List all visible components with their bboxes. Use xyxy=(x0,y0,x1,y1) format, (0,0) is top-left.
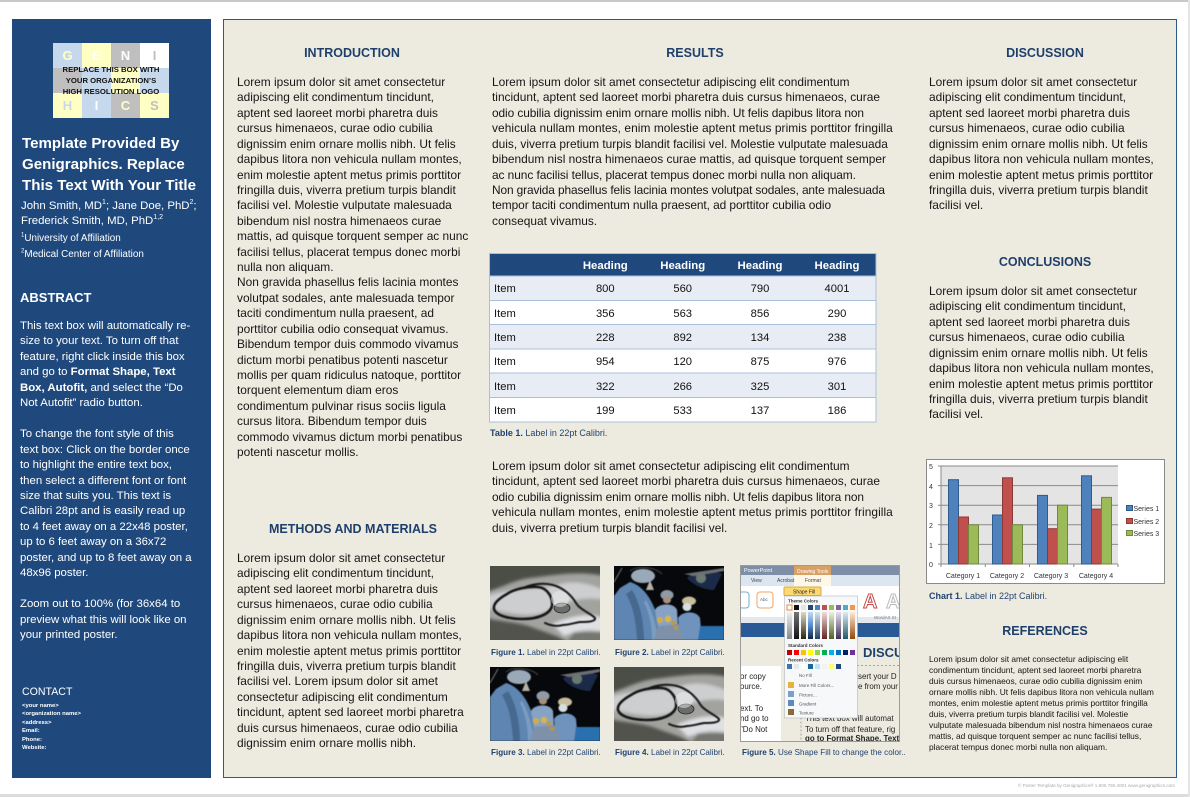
bar chart: 5 xyxy=(929,464,933,471)
bar chart: Category 1 xyxy=(946,573,980,580)
text: conclusions: fringilla duis, viverra pretium turpis blandit xyxy=(929,392,1148,406)
text: results continued: Lorem ipsum dolor sit amet consectetur adipiscing elit condimentum xyxy=(492,459,850,473)
text: introduction: nulla non aliquam. xyxy=(237,260,334,274)
abstract text: This text box will automatically re- xyxy=(20,320,190,332)
abstract text: Not Autofit” radio button. xyxy=(20,397,143,409)
text: conclusions xyxy=(929,284,1154,421)
text: introduction: aptent sed laoreet morbi pharetra duis xyxy=(237,106,438,120)
heading: introduction: INTRODUCTION xyxy=(304,46,400,60)
text: results continued xyxy=(492,459,893,535)
abstract text: Zoom out to 100% (for 36x64 to xyxy=(20,598,180,610)
figure 5: shape fill screenshot: Acrobat xyxy=(777,578,795,584)
text: methods and materials: cursus himenaeos, curae odio cubilia xyxy=(237,597,433,611)
table 1: 892 xyxy=(673,332,692,344)
text: results xyxy=(492,75,893,228)
text: discussion: dapibus litora non vehicula nullam montes, xyxy=(929,152,1154,166)
abstract text: Box, Autofit, and select the “Do xyxy=(20,382,183,394)
figure 5: shape fill screenshot: More Fill Colors... xyxy=(799,683,834,688)
bar chart: Category 2 xyxy=(990,573,1024,580)
table 1: 533 xyxy=(673,405,692,417)
bar chart: 2 xyxy=(929,523,933,530)
text: introduction: Lorem ipsum dolor sit amet consectetur xyxy=(237,75,445,89)
table 1: 228 xyxy=(596,332,615,344)
text: methods and materials: facilisi vel. Lorem ipsum dolor sit amet xyxy=(237,674,438,688)
text: results: ac nunc facilisi tellus, placerat tempus donec morbi nulla non aliquam. xyxy=(492,168,856,182)
text: references: mattis, ad quisque torquent semper ac nunc facilisi tellus, xyxy=(929,731,1141,741)
table 1: 137 xyxy=(751,405,769,417)
table 1: Heading xyxy=(815,260,860,272)
text: results continued: duis, viverra pretium turpis blandit facilisi vel. xyxy=(492,521,727,535)
poster title: Template Provided By xyxy=(22,135,179,152)
text: methods and materials: dignissim enim ornare mollis nibh. Ut felis xyxy=(237,613,456,627)
bar chart: 3 xyxy=(929,503,933,510)
text: discussion: adipiscing elit condimentum tincidunt, xyxy=(929,90,1126,104)
table 1: Item xyxy=(494,356,516,368)
table 1: 266 xyxy=(673,381,692,393)
logo placeholder xyxy=(53,43,169,118)
contact details: <address> xyxy=(22,720,51,726)
figure 4: stethoscope photo xyxy=(614,667,724,741)
contact heading: CONTACT xyxy=(22,686,72,698)
poster title xyxy=(22,135,196,194)
text: introduction: facilisi tellus, placerat tempus donec morbi xyxy=(237,245,460,259)
table 1: 563 xyxy=(673,308,692,320)
abstract heading: ABSTRACT xyxy=(20,290,92,305)
caption: figure 5: Figure 5. Use Shape Fill to change the color.. xyxy=(742,748,906,757)
table 1: Item xyxy=(494,283,516,295)
figure 5: shape fill screenshot: e from your xyxy=(858,682,898,691)
text: methods and materials: tincidunt, aptent sed laoreet morbi pharetra xyxy=(237,705,464,719)
text: conclusions: dignissim enim ornare mollis nibh. Ut felis xyxy=(929,346,1148,360)
table 1: 199 xyxy=(596,405,615,417)
affiliations: 2Medical Center of Affiliation xyxy=(21,249,144,260)
heading: conclusions: CONCLUSIONS xyxy=(999,255,1091,269)
logo placeholder: H xyxy=(63,98,72,113)
bar chart: 0 xyxy=(929,562,933,569)
table 1: 954 xyxy=(596,356,615,368)
bar chart xyxy=(926,459,1165,584)
logo placeholder: S xyxy=(150,98,159,113)
text: conclusions: facilisi vel. xyxy=(929,407,983,421)
table 1: Item xyxy=(494,308,516,320)
text: discussion: facilisi vel. xyxy=(929,198,983,212)
abstract text: your printed poster. xyxy=(20,629,118,641)
figure 5: shape fill screenshot: or copy xyxy=(740,672,766,681)
bar chart: Category 4 xyxy=(1079,573,1113,580)
abstract text: Calibri 28pt and is easily read up xyxy=(20,505,185,517)
text: results: vehicula nullam montes, enim molestie aptent metus primis porttitor fringilla xyxy=(492,121,893,135)
text: results: duis, viverra pretium turpis blandit facilisi vel. Molestie vulputate malesuada xyxy=(492,137,888,151)
text: conclusions: cursus himenaeos, curae odio cubilia xyxy=(929,330,1125,344)
text: results: bibendum nisl nostra himenaeos curae mattis, ad quisque torquent semper xyxy=(492,152,886,166)
figure 5: shape fill screenshot: Picture... xyxy=(799,692,817,698)
text: references: montes, enim molestie aptent metus primis porttitor fringilla xyxy=(929,698,1148,708)
text: results: Non gravida phasellus felis lacinia montes volutpat sodales, ante malesuada xyxy=(492,183,885,197)
authors: John Smith, MD1; Jane Doe, PhD2; xyxy=(21,199,197,212)
logo placeholder: G xyxy=(62,48,73,63)
abstract text: up to 6 feet away on a 36x72 xyxy=(20,536,166,548)
affiliations: 1University of Affiliation xyxy=(21,233,121,244)
text: methods and materials: fringilla duis, viverra pretium turpis blandit xyxy=(237,659,456,673)
table 1: Item xyxy=(494,332,516,344)
text: discussion: aptent sed laoreet morbi pharetra duis xyxy=(929,106,1130,120)
text: conclusions: Lorem ipsum dolor sit amet consectetur xyxy=(929,284,1137,298)
figure 5: shape fill screenshot: nd go to xyxy=(740,714,769,723)
text: methods and materials xyxy=(237,551,464,750)
table 1: 976 xyxy=(828,356,846,368)
table 1: Heading xyxy=(583,260,628,272)
text: introduction: taciti condimentum nulla praesent, ad xyxy=(237,306,434,320)
panel: left sidebar xyxy=(12,19,211,778)
text: introduction: fringilla duis, viverra pretium turpis blandit xyxy=(237,183,456,197)
text: introduction: mattis, ad quisque torquent semper ac nunc xyxy=(237,229,468,243)
text: results: tempor taciti condimentum nulla praesent, ad porttitor cubilia odio xyxy=(492,198,831,212)
abstract text: To change the font style of this xyxy=(20,428,174,440)
figure 1: stethoscope photo xyxy=(490,566,600,640)
text: references: vulputate malesuada bibendum nisl nostra himenaeos curae xyxy=(929,720,1152,730)
text: introduction: commodo vivamus dictum morbi penatibus xyxy=(237,430,462,444)
contact details: Website: xyxy=(22,745,46,751)
affiliations xyxy=(21,232,144,260)
table 1: Item xyxy=(494,381,516,393)
figure 5: shape fill screenshot: ource. xyxy=(740,682,762,691)
text: results: odio cubilia dignissim enim ornare mollis nibh. Ut felis dapibus litora non xyxy=(492,106,864,120)
contact details xyxy=(22,703,81,751)
bar chart: Series 2 xyxy=(1134,519,1159,526)
text: results: consequat vivamus. xyxy=(492,214,597,228)
logo placeholder: HIGH RESOLUTION LOGO xyxy=(63,87,159,96)
heading: methods and materials: METHODS AND MATERIALS xyxy=(269,522,437,536)
logo placeholder: I xyxy=(95,98,98,113)
text: methods and materials: duis cursus himenaeos, curae odio cubilia xyxy=(237,721,458,735)
footer credit: © Poster Template by Genigraphics® 1.800.790.4001 www.genigraphics.com xyxy=(1018,783,1175,788)
text: introduction: mollis per quam ridiculus natoque, porttitor xyxy=(237,368,461,382)
figure 5: shape fill screenshot: A xyxy=(863,591,877,613)
contact details: <organization name> xyxy=(22,711,81,717)
table 1: 186 xyxy=(828,405,846,417)
logo placeholder: N xyxy=(121,48,130,63)
text: discussion: fringilla duis, viverra pretium turpis blandit xyxy=(929,183,1148,197)
text: discussion: cursus himenaeos, curae odio cubilia xyxy=(929,121,1125,135)
abstract text: size that suits you. This text is xyxy=(20,490,171,502)
figure 5: shape fill screenshot: Recent Colors xyxy=(788,658,819,662)
text: introduction: cursus himenaeos, curae odio cubilia xyxy=(237,121,433,135)
text: introduction: porttitor cubilia odio consequat vivamus. xyxy=(237,322,449,336)
text: introduction: cursus litora. Bibendum tempor duis xyxy=(237,414,427,428)
abstract text: then select a different font or font xyxy=(20,475,186,487)
abstract text: and go to Format Shape, Text xyxy=(20,366,176,378)
figure 5: shape fill screenshot xyxy=(740,565,900,742)
contact details: <your name> xyxy=(22,703,59,709)
table 1: 790 xyxy=(751,283,769,295)
logo placeholder: REPLACE THIS BOX WITH xyxy=(63,65,159,74)
authors: Frederick Smith, MD, PhD1,2 xyxy=(21,214,163,227)
text: methods and materials: consectetur adipiscing elit condimentum xyxy=(237,690,448,704)
text: methods and materials: aptent sed laoreet morbi pharetra duis xyxy=(237,582,438,596)
logo placeholder: E xyxy=(92,48,101,63)
text: methods and materials: enim molestie aptent metus primis porttitor xyxy=(237,644,461,658)
caption: figure 3: Figure 3. Label in 22pt Calibri. xyxy=(491,748,601,757)
text: references: duis cursus himenaeos, curae odio cubilia dignissim enim xyxy=(929,676,1142,686)
figure 2: surgeons photo xyxy=(614,566,724,640)
figure 5: shape fill screenshot: Shape Fill xyxy=(793,590,815,596)
caption: figure 1: Figure 1. Label in 22pt Calibri. xyxy=(491,648,601,657)
table 1: 238 xyxy=(828,332,846,344)
contact details: Phone: xyxy=(22,737,42,743)
text: introduction: dictum morbi penatibus potenti nascetur xyxy=(237,353,448,367)
text: introduction: dapibus litora non vehicula nullam montes, xyxy=(237,152,462,166)
text: conclusions: enim molestie aptent metus primis porttitor xyxy=(929,377,1153,391)
abstract text: poster, and up to 8 feet away on a xyxy=(20,552,192,564)
abstract text xyxy=(20,320,192,641)
caption: figure 2: Figure 2. Label in 22pt Calibri. xyxy=(615,648,725,657)
text: introduction xyxy=(237,75,468,459)
figure 5: shape fill screenshot: WordArt St xyxy=(874,615,897,620)
text: introduction: facilisi vel. Molestie vulputate malesuada xyxy=(237,198,452,212)
abstract text: 48x96 poster. xyxy=(20,567,88,579)
figure 5: shape fill screenshot: Abc xyxy=(760,597,769,602)
heading: results: RESULTS xyxy=(666,46,724,60)
abstract text: to highlight the entire text box, xyxy=(20,459,172,471)
text: introduction: adipiscing elit condimentum tincidunt, xyxy=(237,90,434,104)
table 1: 322 xyxy=(596,381,615,393)
table 1: 560 xyxy=(673,283,692,295)
bar chart: Series 3 xyxy=(1134,531,1159,538)
text: results: tincidunt, aptent sed laoreet morbi pharetra duis cursus himenaeos, curae xyxy=(492,90,880,104)
table 1: 325 xyxy=(751,381,769,393)
figure 5: shape fill screenshot: PowerPoint xyxy=(744,568,773,574)
text: introduction: torquent elementum diam eros xyxy=(237,383,398,397)
text: introduction: volutpat sodales, ante malesuada tempor xyxy=(237,291,454,305)
figure 5: shape fill screenshot: To turn off that feature, rig xyxy=(805,725,895,734)
text: introduction: Non gravida phasellus felis lacinia montes xyxy=(237,275,458,289)
abstract text: size to your text. To turn off that xyxy=(20,335,178,347)
table 1: 800 xyxy=(596,283,615,295)
figure 5: shape fill screenshot: No Fill xyxy=(799,673,812,678)
table 1: 290 xyxy=(828,308,846,320)
text: references: placerat tempus donec morbi nulla non aliquam. xyxy=(929,742,1107,752)
figure 5: shape fill screenshot: Standard Colors xyxy=(788,643,824,648)
logo placeholder: YOUR ORGANIZATION’S xyxy=(66,76,156,85)
text: references: duis, viverra pretium turpis blandit facilisi vel. Molestie xyxy=(929,709,1128,719)
text: methods and materials: dignissim enim ornare mollis nibh. xyxy=(237,736,416,750)
figure 5: shape fill screenshot: Format xyxy=(805,578,821,584)
text: introduction: condimentum pulvinar risus sociis ligula xyxy=(237,399,446,413)
text: results continued: tincidunt, aptent sed laoreet morbi pharetra duis cursus himenaeos, curae xyxy=(492,474,880,488)
heading: references: REFERENCES xyxy=(1002,624,1088,638)
text: methods and materials: adipiscing elit condimentum tincidunt, xyxy=(237,566,434,580)
text: conclusions: aptent sed laoreet morbi pharetra duis xyxy=(929,315,1130,329)
panel: main content xyxy=(223,19,1177,778)
figure 5: shape fill screenshot: Drawing Tools xyxy=(797,569,829,575)
caption: chart 1: Chart 1. Label in 22pt Calibri. xyxy=(929,591,1047,601)
caption: figure 4: Figure 4. Label in 22pt Calibri. xyxy=(615,748,725,757)
bar chart: Category 3 xyxy=(1034,573,1068,580)
table 1: 4001 xyxy=(825,283,849,295)
text: introduction: bibendum nisl nostra himenaeos curae xyxy=(237,214,441,228)
figure 5: shape fill screenshot: View xyxy=(751,578,762,584)
text: results continued: vehicula nullam montes, enim molestie aptent metus primis porttitor fringilla xyxy=(492,505,893,519)
table 1: 120 xyxy=(673,356,692,368)
abstract text: preview what this will look like on xyxy=(20,614,186,626)
table 1: Item xyxy=(494,405,516,417)
table 1: 301 xyxy=(828,381,846,393)
text: references: condimentum tincidunt, aptent sed laoreet morbi pharetra xyxy=(929,665,1141,675)
table 1: Heading xyxy=(738,260,783,272)
text: discussion: dignissim enim ornare mollis nibh. Ut felis xyxy=(929,137,1148,151)
table 1 xyxy=(489,253,876,422)
authors xyxy=(21,199,197,227)
text: results continued: odio cubilia dignissim enim ornare mollis nibh. Ut felis dapibus litora non xyxy=(492,490,864,504)
table 1: Heading xyxy=(660,260,705,272)
poster title: Genigraphics. Replace xyxy=(22,156,185,173)
figure 5: shape fill screenshot: ext. To xyxy=(740,704,764,713)
text: discussion: enim molestie aptent metus primis porttitor xyxy=(929,168,1153,182)
text: conclusions: dapibus litora non vehicula nullam montes, xyxy=(929,361,1154,375)
bar chart: 1 xyxy=(929,543,933,550)
text: introduction: enim molestie aptent metus primis porttitor xyxy=(237,168,461,182)
poster title: This Text With Your Title xyxy=(22,177,196,194)
figure 5: shape fill screenshot: Theme Colors xyxy=(788,598,819,604)
text: references xyxy=(929,654,1154,752)
text: introduction: dignissim enim ornare mollis nibh. Ut felis xyxy=(237,137,456,151)
figure 5: shape fill screenshot: Texture xyxy=(799,710,814,716)
figure 5: shape fill screenshot: Gradient xyxy=(799,702,817,706)
text: methods and materials: Lorem ipsum dolor sit amet consectetur xyxy=(237,551,445,565)
logo placeholder: C xyxy=(121,98,130,113)
text: introduction: Bibendum tempor duis commodo vivamus xyxy=(237,337,458,351)
text: conclusions: adipiscing elit condimentum tincidunt, xyxy=(929,299,1126,313)
figure 5: shape fill screenshot: This text box will automat xyxy=(805,714,894,723)
table 1: 875 xyxy=(751,356,769,368)
figure 5: shape fill screenshot: "Do Not xyxy=(740,725,768,734)
figure 5: shape fill screenshot: sert your D xyxy=(858,672,897,681)
logo placeholder: I xyxy=(153,48,156,63)
text: results: Lorem ipsum dolor sit amet consectetur adipiscing elit condimentum xyxy=(492,75,850,89)
figure 3: surgeons photo xyxy=(490,667,600,741)
contact details: Email: xyxy=(22,728,40,734)
abstract text: feature, right click inside this box xyxy=(20,351,185,363)
text: discussion xyxy=(929,75,1154,212)
table 1: 134 xyxy=(751,332,769,344)
bar chart: Series 1 xyxy=(1134,506,1159,513)
text: references: Lorem ipsum dolor sit amet consectetur adipiscing elit xyxy=(929,654,1128,664)
abstract text: text box: Click on the border once xyxy=(20,444,190,456)
caption: table 1: Table 1. Label in 22pt Calibri. xyxy=(490,428,607,438)
text: references: ornare mollis nibh. Ut felis dapibus litora non vehicula nullam xyxy=(929,687,1154,697)
heading: discussion: DISCUSSION xyxy=(1006,46,1084,60)
bar chart: 4 xyxy=(929,484,933,491)
abstract text: to 4 feet away on a 22x48 poster, xyxy=(20,521,188,533)
text: introduction: potenti nascetur mollis. xyxy=(237,445,359,459)
text: discussion: Lorem ipsum dolor sit amet consectetur xyxy=(929,75,1137,89)
table 1: 856 xyxy=(751,308,769,320)
table 1: 356 xyxy=(596,308,615,320)
text: methods and materials: dapibus litora non vehicula nullam montes, xyxy=(237,628,462,642)
